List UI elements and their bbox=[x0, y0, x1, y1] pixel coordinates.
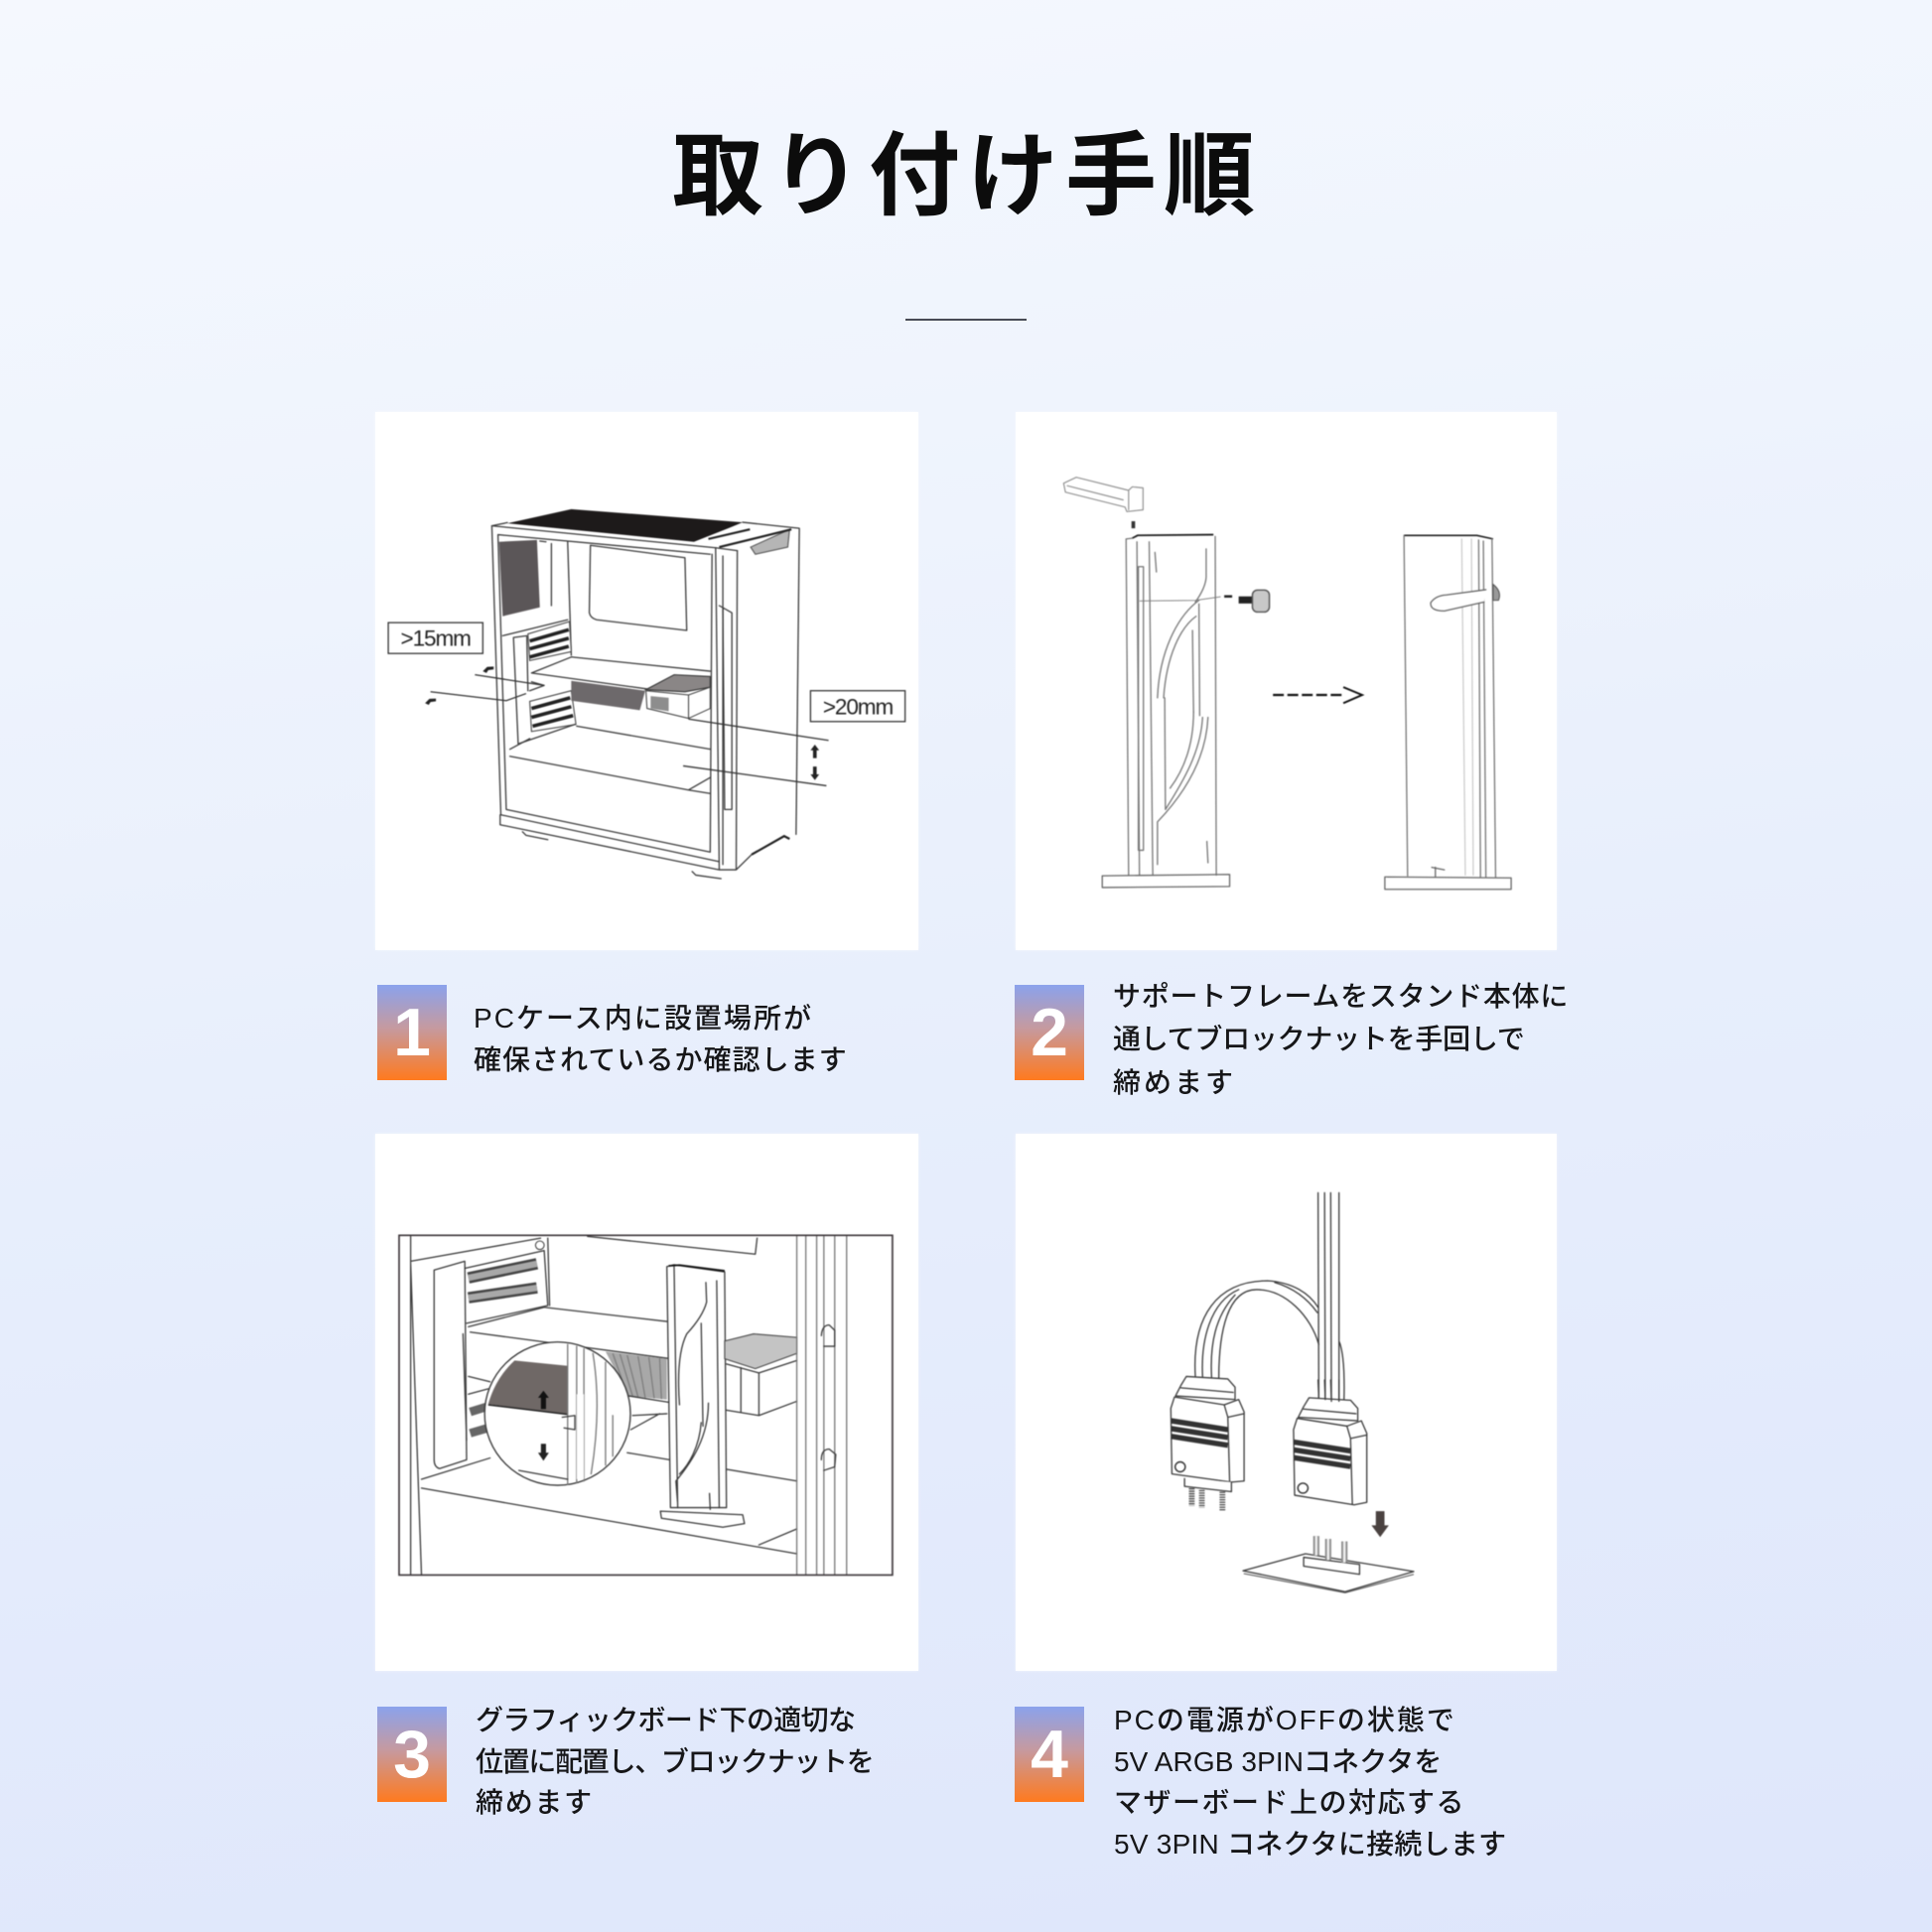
dashed process arrow bbox=[1273, 687, 1362, 703]
rear fan mount bbox=[499, 540, 571, 655]
clearance guide lines bbox=[431, 675, 829, 785]
step 1 text: 確保されているか確認します bbox=[474, 1044, 848, 1075]
step 3 text: 位置に配置し、ブロックナットを bbox=[476, 1746, 874, 1777]
side panel rails bbox=[797, 1236, 847, 1575]
motherboard header bbox=[1243, 1536, 1414, 1592]
step 1 text bbox=[474, 1003, 848, 1075]
step 1 number badge bbox=[377, 985, 447, 1080]
step 3 text: グラフィックボード下の適切な bbox=[476, 1705, 855, 1735]
clearance arrows bbox=[425, 666, 819, 780]
graphics card body bbox=[463, 1308, 674, 1441]
expansion slots bbox=[469, 1264, 537, 1298]
title divider bbox=[905, 319, 1027, 321]
step 3 number badge bbox=[377, 1707, 447, 1802]
step 4 text: PCの電源がOFFの状態で bbox=[1114, 1705, 1456, 1735]
label: greater than 20mm: >20mm bbox=[823, 694, 894, 719]
illustration: support frame and thumb nut assembly bbox=[1062, 477, 1513, 892]
label: greater than 15mm bbox=[388, 622, 483, 653]
case body outline bbox=[491, 526, 789, 879]
step 2 text: 締めます bbox=[1113, 1067, 1236, 1098]
main cable bbox=[1318, 1192, 1344, 1401]
case floor bbox=[510, 726, 710, 793]
step 2 text bbox=[1113, 981, 1569, 1098]
step 1 text: PCケース内に設置場所が bbox=[474, 1003, 813, 1034]
downward arrow bbox=[1371, 1511, 1389, 1537]
left connector bbox=[1171, 1376, 1244, 1510]
step 2 number badge bbox=[1015, 985, 1084, 1080]
case interior lines bbox=[411, 1236, 797, 1575]
right connector bbox=[1294, 1398, 1367, 1505]
step 3 number badge: 3 bbox=[393, 1717, 431, 1792]
support stand bbox=[660, 1265, 745, 1527]
step 4 text bbox=[1114, 1705, 1506, 1860]
step 3 text: 締めます bbox=[476, 1787, 594, 1818]
illustration: 5V ARGB connector attaching to motherboard header bbox=[1170, 1191, 1416, 1594]
magnified detail circle bbox=[484, 1342, 630, 1485]
power supply box bbox=[725, 1334, 797, 1416]
illustration frame bbox=[399, 1235, 893, 1575]
stand assembled view bbox=[1385, 535, 1511, 890]
label: greater than 15mm: >15mm bbox=[401, 626, 471, 651]
step 2 text: 通してブロックナットを手回しで bbox=[1113, 1024, 1525, 1054]
panel: step 2 illustration card bbox=[1016, 412, 1557, 950]
step 4 text: 5V ARGB 3PINコネクタを bbox=[1114, 1746, 1442, 1777]
label: greater than 20mm bbox=[810, 691, 905, 722]
step 3 text bbox=[476, 1705, 874, 1818]
branch cable bbox=[1195, 1281, 1318, 1378]
step 1 number badge: 1 bbox=[393, 995, 431, 1070]
step 4 text: 5V 3PIN コネクタに接続します bbox=[1114, 1829, 1506, 1860]
thumb nut bbox=[1224, 590, 1270, 612]
expansion slots bbox=[513, 621, 576, 744]
panel: step 3 illustration card bbox=[375, 1134, 918, 1671]
title: 取り付け手順 bbox=[672, 102, 1262, 234]
illustration: frame placed below graphics card with magnified detail bbox=[397, 1233, 894, 1577]
illustration: PC case with clearance dimensions bbox=[387, 508, 907, 880]
cable over right connector top bbox=[1318, 1380, 1339, 1401]
step 2 text: サポートフレームをスタンド本体に bbox=[1113, 981, 1569, 1012]
graphics card bbox=[530, 657, 710, 719]
panel: step 1 illustration card bbox=[375, 412, 918, 950]
step 4 number badge bbox=[1015, 1707, 1084, 1802]
side window bbox=[590, 545, 687, 630]
vertical side strip bbox=[719, 606, 732, 809]
panel: step 4 illustration card bbox=[1016, 1134, 1557, 1671]
stand front view bbox=[1102, 535, 1230, 888]
step 4 number badge: 4 bbox=[1031, 1717, 1068, 1792]
step 2 number badge: 2 bbox=[1031, 995, 1068, 1070]
step 4 text: マザーボード上の対応する bbox=[1114, 1787, 1465, 1818]
support bracket bbox=[1063, 478, 1143, 528]
case top panel bbox=[491, 509, 799, 834]
